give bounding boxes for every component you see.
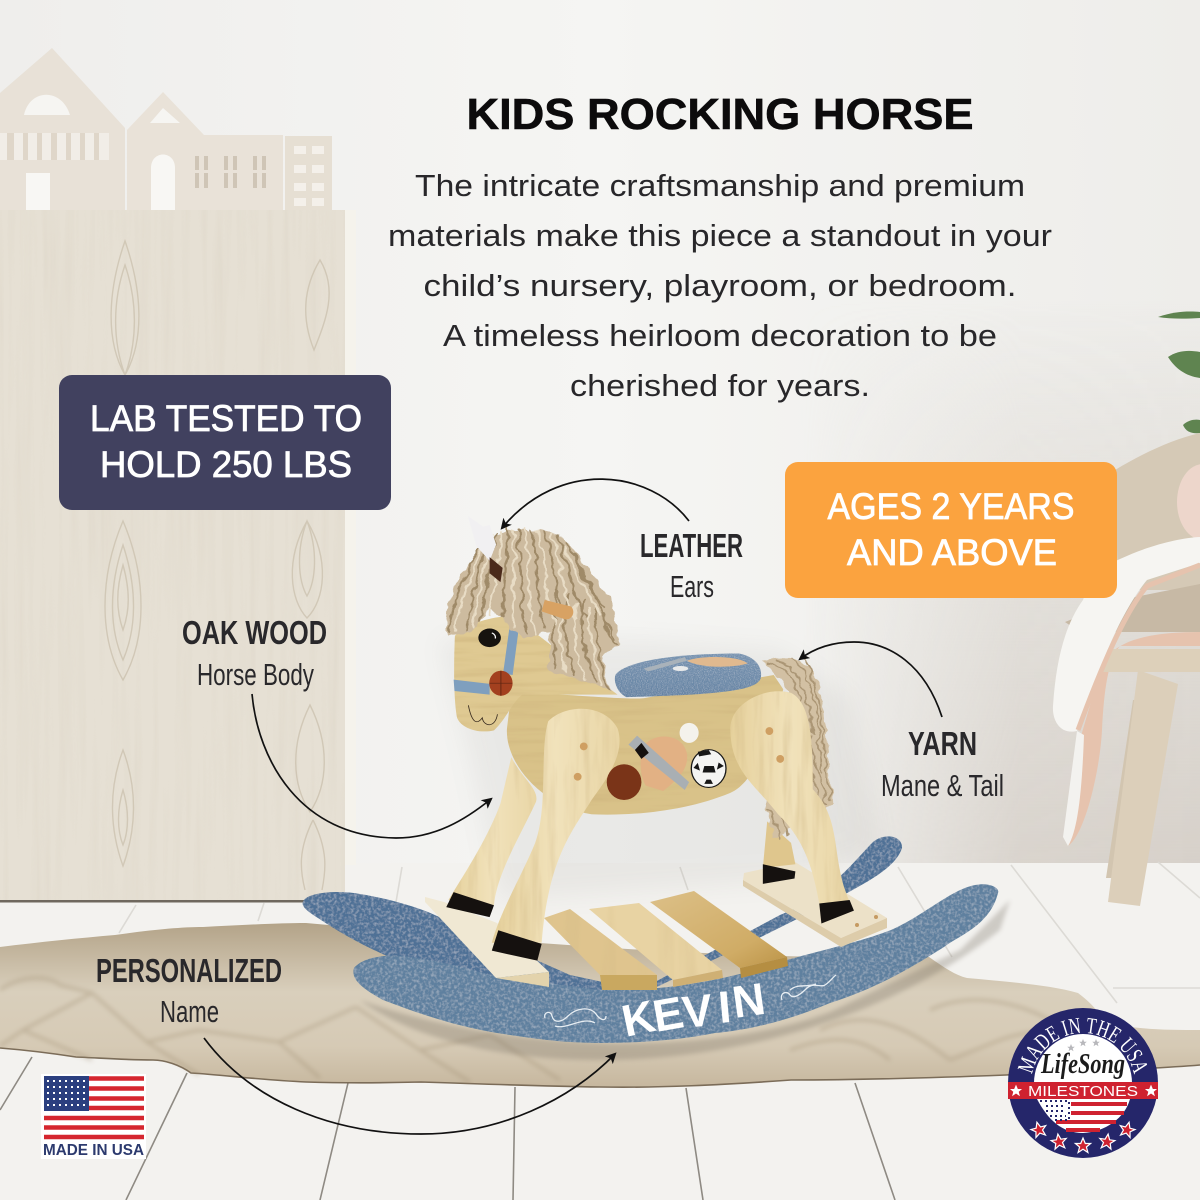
badge red stars — [1030, 1120, 1136, 1152]
seat board — [1103, 649, 1200, 672]
description text — [388, 168, 1052, 403]
far front leg — [446, 757, 536, 917]
plant leaves — [1158, 312, 1200, 433]
label: leather ears: LEATHER — [640, 527, 743, 564]
description text: cherished for years. — [570, 368, 870, 403]
near front leg — [492, 709, 620, 943]
callout: ages: AND ABOVE — [847, 532, 1057, 573]
blanket tail — [1063, 731, 1084, 846]
title: KIDS ROCKING HORSE — [466, 90, 974, 139]
front leg — [1108, 670, 1178, 906]
badge logo script: LifeSong — [1040, 1049, 1125, 1080]
bridle straps — [454, 614, 520, 695]
made in usa label: MADE IN USA — [43, 1142, 144, 1159]
far back leg — [763, 821, 795, 884]
floor shadow — [360, 900, 1010, 1060]
blanket edge — [1078, 565, 1200, 730]
callout: lab tested — [59, 375, 391, 510]
horse tail — [763, 658, 832, 839]
peg handle — [542, 600, 573, 619]
seat cushion — [1065, 584, 1200, 632]
label: leather ears: Ears — [670, 569, 714, 604]
horse body — [507, 675, 783, 815]
label: personalized — [96, 952, 282, 1029]
label: oak wood — [182, 614, 327, 692]
back leg — [1106, 700, 1150, 878]
label: yarn — [881, 725, 1004, 803]
callout: lab tested: LAB TESTED TO — [90, 398, 362, 439]
near back leg — [730, 691, 850, 904]
callout: ages — [785, 462, 1117, 598]
arrow: personalized — [204, 1038, 615, 1134]
chair — [1053, 433, 1200, 906]
near back hoof — [819, 900, 854, 924]
seat — [615, 654, 761, 697]
description text: A timeless heirloom decoration to be — [443, 318, 997, 353]
wood panel — [0, 210, 356, 902]
label: leather ears — [640, 527, 743, 604]
label: yarn: Mane & Tail — [881, 768, 1004, 803]
label: oak wood: Horse Body — [197, 657, 314, 692]
mane — [446, 529, 620, 691]
wall background — [866, 356, 1200, 863]
blanket — [1053, 537, 1200, 732]
horse figure — [446, 516, 854, 961]
eye and ball ornament — [468, 629, 513, 725]
name KEVIN on rocker: KEVIN — [617, 973, 768, 1047]
label: personalized: PERSONALIZED — [96, 952, 282, 989]
decorative wooden houses — [0, 48, 332, 210]
chair back — [1115, 433, 1200, 590]
arrow: leather — [502, 479, 689, 528]
blanket pink layer — [1068, 632, 1200, 846]
rocking horse — [303, 516, 1010, 1060]
back rocker — [303, 836, 902, 995]
arrow: oak wood — [252, 694, 491, 838]
sports decals — [607, 723, 726, 800]
floor — [0, 862, 1200, 1200]
front rocker — [353, 884, 998, 1043]
badge: made in the usa — [1008, 1008, 1158, 1158]
right base board — [743, 862, 887, 947]
horse head — [454, 616, 618, 731]
badge: made in the usa: MILESTONES — [1028, 1083, 1138, 1100]
leather ears — [468, 516, 503, 582]
badge band stars — [1010, 1085, 1157, 1096]
badge: made in the usa: MADE IN THE USA — [1018, 1018, 1148, 1074]
label: yarn: YARN — [908, 725, 977, 762]
pink pillow — [1177, 464, 1200, 540]
name KEVIN on rocker — [545, 973, 836, 1047]
rug — [0, 923, 1200, 1087]
badge red band — [1008, 1082, 1158, 1099]
near front hoof — [492, 930, 542, 961]
callout: ages: AGES 2 YEARS — [828, 486, 1074, 527]
description text: The intricate craftsmanship and premium — [415, 168, 1025, 203]
description text: child’s nursery, playroom, or bedroom. — [424, 268, 1017, 303]
label: personalized: Name — [160, 994, 219, 1029]
label: oak wood: OAK WOOD — [182, 614, 327, 651]
arrow: yarn — [800, 642, 942, 717]
slats — [544, 891, 788, 990]
horse shadow — [440, 640, 880, 900]
left base board — [425, 897, 549, 987]
scroll flourishes — [545, 975, 836, 1027]
callout: lab tested: HOLD 250 LBS — [100, 444, 352, 485]
usa flag — [41, 1074, 146, 1159]
leg dowels — [574, 727, 784, 781]
description text: materials make this piece a standout in your — [388, 218, 1052, 253]
badge flag — [1037, 1099, 1130, 1133]
badge grey stars — [1067, 1039, 1100, 1051]
